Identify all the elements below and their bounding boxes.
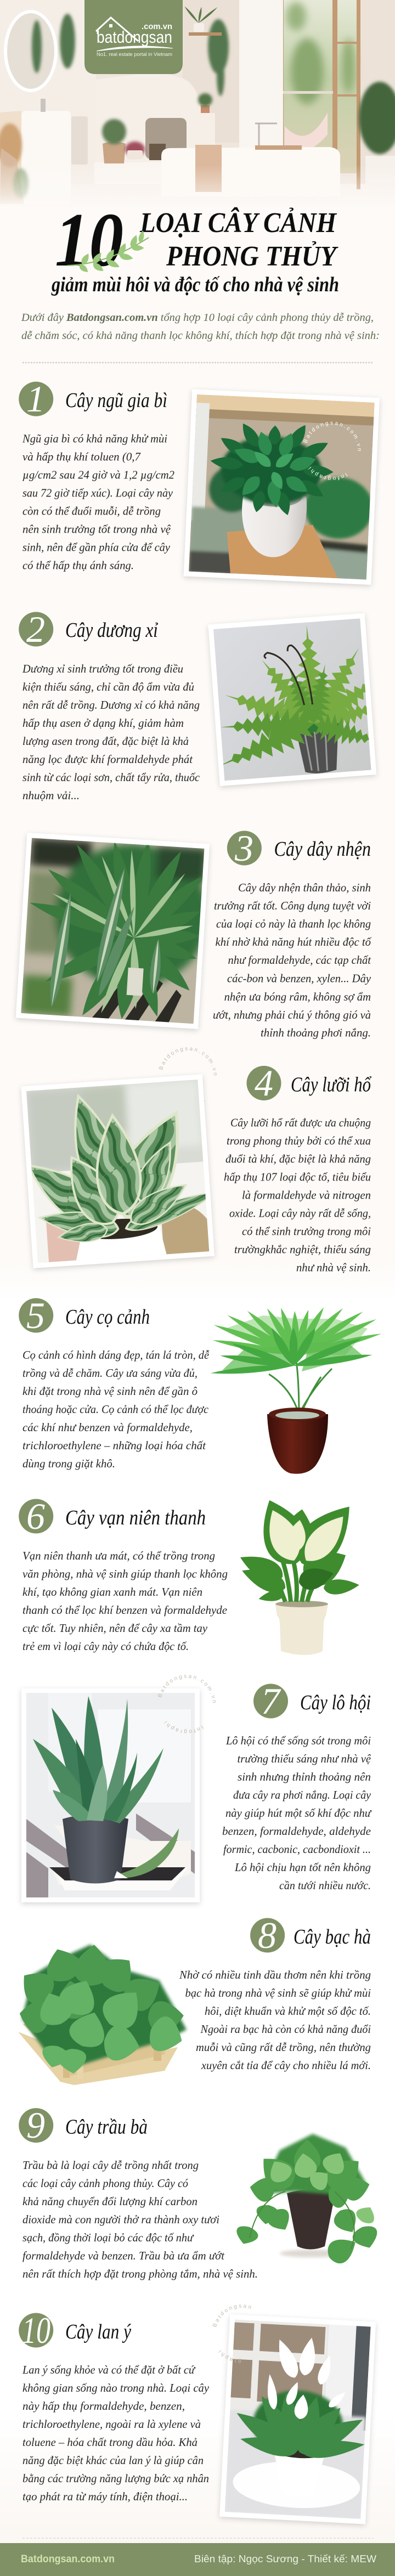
- text block 9: [22, 2159, 258, 2280]
- photo: snake plant: [12, 1074, 225, 1269]
- text block 8: Nhờ có nhiều tinh dầu thơm nên khi trồng: [179, 1968, 371, 1981]
- image: pothos in brown pot: [233, 2134, 381, 2268]
- number badge 7: 7: [261, 1680, 281, 1722]
- icon: house roof: [96, 18, 138, 41]
- photo: spider plant: [16, 832, 213, 1029]
- watermark stamp: Batdongsan.com.vn: [159, 1047, 217, 1075]
- text block 3: ướt, nhưng phải chú ý thông gió và: [213, 1008, 371, 1021]
- text block 1: sau 72 giờ tiếp xúc). Loại cây này: [22, 486, 173, 499]
- text block 4: hấp thụ 107 loại độc tố, tiêu biểu: [224, 1171, 371, 1184]
- text block 3: trưởng rất tốt. Công dụng tuyệt vời: [214, 899, 371, 912]
- text block 6: [22, 1549, 228, 1653]
- bath tap: [255, 123, 277, 145]
- title: PHONG THỦY: [166, 241, 338, 272]
- number badge 2: [19, 608, 53, 650]
- text block 6: Vạn niên thanh ưa mát, có thể trồng trong: [22, 1549, 215, 1562]
- text block 3: [213, 881, 371, 1039]
- panel: item 7: [19, 1675, 372, 1906]
- panel: item 9: [19, 2104, 381, 2280]
- text block 3: nhện ưa bóng râm, không sợ ẩm: [224, 990, 371, 1003]
- text block 4: oxide. Loại cây này rất dễ sống,: [229, 1207, 371, 1220]
- text block 4: [224, 1116, 371, 1274]
- curtain: [239, 0, 283, 151]
- title: LOẠI CÂY CẢNH: [139, 207, 337, 239]
- text block 7: benzen, formaldehyde, aldehyde: [222, 1824, 371, 1838]
- logo panel: .com.vn: [142, 22, 172, 31]
- logo panel: [84, 0, 183, 74]
- text block 3: Cây dây nhện thân thảo, sinh: [238, 881, 371, 894]
- mirror: [4, 10, 58, 92]
- panel: item 5: [19, 1295, 382, 1474]
- text block 7: Lô hội có thể sống sót trong môi: [225, 1734, 371, 1747]
- text block 4: như nhà vệ sinh.: [296, 1261, 371, 1274]
- number badge 4: [247, 1062, 281, 1104]
- text block 10: toluene – hóa chất trong dầu hỏa. Khả: [22, 2436, 198, 2449]
- bathtub: [161, 147, 340, 184]
- right plant and planter: [365, 156, 395, 184]
- text block 3: thỉnh thoảng phơi nắng.: [261, 1026, 371, 1039]
- subtitle: giảm mùi hôi và độc tố cho nhà vệ sinh: [51, 273, 339, 296]
- text block 5: trichloroethylene – những loại hóa chất: [22, 1439, 206, 1452]
- text block 9: sạch, đồng thời loại bỏ các độc tố như: [22, 2231, 194, 2244]
- panel: item 4: [19, 1047, 372, 1274]
- text block 10: [22, 2363, 210, 2503]
- text block 3: khí nhờ khả năng hút nhiều độc tố: [215, 935, 371, 948]
- text block 7: Lô hội chịu hạn tốt nên không: [234, 1861, 371, 1874]
- text block 2: hấp thụ asen ở dạng khí, giảm hàm: [22, 716, 184, 730]
- footer site name: Batdongsan.com.vn: [21, 2554, 115, 2565]
- watermark stamp: Batdongsan.com.vn: [158, 1675, 216, 1703]
- text block 2: [22, 662, 200, 802]
- text block 6: cực tốt. Tuy nhiên, nên để cây xa tầm tay: [22, 1622, 208, 1635]
- text block 10: trichloroethylene, ngoài ra là xylene và: [22, 2417, 201, 2431]
- panel: item 1: [19, 378, 382, 588]
- number badge 1: [19, 378, 53, 420]
- text block 4: trong phong thủy bởi có thể xua: [227, 1134, 371, 1148]
- text block 6: khí, tạo không gian xanh mát. Vạn niên: [22, 1585, 202, 1598]
- text block 9: Trầu bà là loại cây dễ trồng nhất trong: [22, 2159, 199, 2172]
- text block 9: dioxide mà con người thở ra thành oxy tươi: [22, 2213, 219, 2226]
- text block 5: [22, 1348, 210, 1470]
- heading 1: Cây ngũ gia bì: [65, 389, 167, 412]
- text block 1: và hấp thụ khí toluen (0,7: [22, 450, 141, 463]
- text block 3: như formaldehyde, các tạp chất: [228, 953, 371, 967]
- watermark stamp: [158, 1675, 216, 1733]
- heading 3: Cây dây nhện: [274, 838, 371, 861]
- text block 10: tạo phát ra từ máy tính, điện thoại...: [22, 2490, 188, 2503]
- text block 9: các loại cây cảnh phong thủy. Cây có: [22, 2177, 188, 2190]
- number badge 8: 8: [258, 1914, 276, 1956]
- text block 7: cần tưới nhiều nước.: [279, 1879, 371, 1892]
- heading 5: Cây cọ cảnh: [65, 1306, 150, 1329]
- panel: item 6: [19, 1492, 365, 1655]
- text block 5: dùng trong giặt khô.: [22, 1457, 115, 1470]
- number badge 9: [19, 2104, 53, 2146]
- left wall accents: [0, 111, 21, 204]
- sink: [21, 111, 71, 184]
- image: palm in red pot: [210, 1306, 382, 1474]
- text block 4: có thể sinh trưởng trong môi: [242, 1224, 371, 1238]
- photo: aloe vera: [21, 1688, 200, 1902]
- panel: item 2: [19, 608, 393, 802]
- photo: peace lily: [219, 2314, 376, 2524]
- text block 2: sinh từ các loại sơn, chất tẩy rửa, thuốc: [22, 771, 200, 784]
- watermark stamp: [159, 1047, 217, 1101]
- text block 2: kiện thiếu sáng, chỉ cần độ ẩm vừa đủ: [22, 680, 194, 693]
- title: 10: [55, 197, 123, 283]
- photo: schefflera in white pot: Batdongsan.com.vn: [303, 421, 361, 451]
- window: [282, 0, 360, 173]
- text block 3: các-bon và benzen, xylen... Dây: [227, 972, 371, 985]
- text block 7: này giúp hút một số khí độc như: [225, 1806, 372, 1820]
- number badge 7: [253, 1680, 288, 1722]
- text block 9: khả năng chuyển đổi lượng khí carbon: [22, 2195, 198, 2208]
- intro text: dễ chăm sóc, có khả năng thanh lọc không khí, thích hợp đặt trong nhà vệ sinh:: [21, 330, 380, 342]
- photo: schefflera in white pot: [182, 389, 382, 588]
- text block 7: formic, cacbonic, cacbondioxit ...: [223, 1843, 371, 1856]
- text block 6: văn phòng, nhà vệ sinh giúp thanh lọc không: [22, 1567, 228, 1580]
- text block 8: muỗi và cũng rất dễ trồng, nên thường: [196, 2041, 371, 2054]
- shelf and pots: [189, 32, 222, 36]
- text block 3: của loại cỏ này là thanh lọc không: [216, 917, 371, 930]
- photo: schefflera in white pot: Infographic: [308, 467, 348, 481]
- heading 7: Cây lô hội: [300, 1691, 371, 1714]
- footer band: [0, 2543, 395, 2576]
- number badge 4: 4: [255, 1062, 273, 1104]
- text block 9: formaldehyde và benzen. Trầu bà ưa ẩm ướt: [22, 2249, 225, 2262]
- heading 2: Cây dương xỉ: [65, 619, 158, 642]
- hero bottom fade: [0, 165, 395, 208]
- number badge 6: [19, 1495, 53, 1537]
- text block 1: nên sinh trưởng tốt trong nhà vệ: [22, 522, 171, 535]
- text block 1: sinh, nên để gần phía cửa để cây: [22, 541, 171, 554]
- intro text: Dưới đây Batdongsan.com.vn tổng hợp 10 loại cây cảnh phong thủy dễ trồng,: [21, 312, 374, 324]
- number badge 1: 1: [26, 378, 45, 420]
- text block 7: [222, 1734, 372, 1892]
- text block 10: này hấp thụ formaldehyde, benzen,: [22, 2399, 185, 2413]
- text block 6: thanh có thể lọc khí benzen và formaldehyde: [22, 1603, 227, 1617]
- footer credits: Biên tập: Ngọc Sương - Thiết kế: MEW: [194, 2554, 376, 2564]
- text block 5: trồng và dễ chăm. Cây ưa sáng vừa đủ,: [22, 1366, 198, 1380]
- heading 9: Cây trầu bà: [65, 2115, 148, 2138]
- text block 2: Dương xỉ sinh trưởng tốt trong điều: [22, 662, 183, 675]
- text block 8: hôi, diệt khuẩn và khử một số độc tố.: [205, 2004, 371, 2018]
- text block 4: Cây lưỡi hổ rất được ưa chuộng: [230, 1116, 371, 1129]
- text block 10: không gian sống nào trong nhà. Loại cây: [22, 2381, 210, 2394]
- text block 2: năng lọc được khí formaldehyde phát: [22, 753, 193, 766]
- heading 6: Cây vạn niên thanh: [65, 1506, 206, 1529]
- watermark stamp: Batdongsan: [213, 2304, 251, 2327]
- text block 8: xuyên cắt tỉa để cây cho nhiều lá mới.: [201, 2059, 371, 2072]
- text block 1: µg/cm2 sau 24 giờ và 1,2 µg/cm2: [22, 468, 174, 482]
- number badge 5: [19, 1295, 53, 1336]
- number badge 10: 10: [22, 2309, 50, 2351]
- text block 4: đuổi tà khí, đặc biệt là khả năng: [225, 1152, 371, 1165]
- hero bathroom scene: [0, 0, 395, 208]
- panel: item 8: [14, 1914, 371, 2085]
- basket and plant: [103, 142, 126, 163]
- text block 7: sinh nhưng thỉnh thoảng nên: [238, 1770, 371, 1783]
- text block 10: Lan ý sống khỏe và có thể đặt ở bất cứ: [22, 2363, 195, 2376]
- title: [55, 197, 338, 283]
- logo panel: batdongsan: [97, 27, 172, 47]
- icon: leaf branch: [67, 230, 149, 274]
- watermark stamp: Infographic: [204, 1100, 205, 1101]
- image: mint in wooden box: [14, 1943, 188, 2085]
- fireplace wall: [96, 74, 215, 163]
- photo: fern: [203, 612, 393, 787]
- panel: item 3: [16, 827, 371, 1039]
- watermark stamp: [213, 2304, 251, 2363]
- text block 1: [22, 432, 174, 572]
- intro text: [21, 312, 380, 342]
- text block 10: bằng các trường năng lượng bức xạ nhân: [22, 2472, 209, 2485]
- number badge 5: 5: [26, 1295, 45, 1336]
- number badge 3: [227, 827, 262, 869]
- text block 1: có thể hấp thụ ánh sáng.: [22, 558, 134, 572]
- text block 10: năng đặc biệt khác của lan ý là giúp cân: [22, 2454, 204, 2467]
- text block 5: khi đặt trong nhà vệ sinh nên để gần ô: [22, 1385, 198, 1398]
- watermark stamp: graphic: [218, 2350, 241, 2363]
- image: dieffenbachia in cream pot: [236, 1492, 365, 1655]
- hammock: [285, 112, 328, 147]
- text block 9: nên rất thích hợp đặt trong phòng tắm, nhà vệ sinh.: [22, 2267, 258, 2280]
- watermark stamp: Infographic: [163, 1721, 204, 1733]
- hanging plants: [32, 14, 229, 96]
- logo panel: No1. real estate portal in Vietnam: [97, 52, 172, 58]
- text block 2: nhuộm vải...: [22, 789, 80, 802]
- text block 5: thoáng hoặc cửa. Cọ cảnh có thể lọc được: [22, 1403, 209, 1416]
- heading 4: Cây lưỡi hổ: [291, 1073, 372, 1096]
- number badge 9: 9: [26, 2104, 45, 2146]
- panel: item 10: [19, 2304, 377, 2528]
- text block 8: bạc hà trong nhà vệ sinh sẽ giúp khử mùi: [185, 1986, 371, 1999]
- heading 10: Cây lan ý: [65, 2320, 131, 2343]
- text block 1: còn có thể đuổi muỗi, dễ trồng: [22, 505, 161, 518]
- text block 8: [179, 1968, 371, 2072]
- text block 7: đưa cây ra phơi nắng. Loại cây: [233, 1788, 371, 1801]
- text block 2: nên rất dễ trồng. Dương xỉ có khả năng: [22, 698, 200, 711]
- text block 7: trường thiếu sáng như nhà vệ: [237, 1752, 371, 1765]
- text block 8: Ngoài ra bạc hà còn có khả năng đuổi: [200, 2023, 371, 2036]
- text block 2: lượng asen trong đất, đặc biệt là khả: [22, 735, 189, 748]
- text block 6: trẻ em vì loại cây này có chứa độc tố.: [22, 1640, 189, 1653]
- heading 8: Cây bạc hà: [294, 1925, 371, 1948]
- number badge 6: 6: [26, 1495, 45, 1537]
- text block 5: Cọ cảnh có hình dáng đẹp, tán lá tròn, dễ: [22, 1348, 210, 1362]
- text block 5: các khí như benzen và formaldehyde,: [22, 1421, 193, 1434]
- number badge 8: [250, 1914, 285, 1956]
- number badge 2: 2: [26, 608, 45, 650]
- text block 1: Ngũ gia bì có khả năng khử mùi: [22, 432, 167, 445]
- number badge 3: 3: [234, 827, 253, 869]
- text block 4: trườngkhắc nghiệt, thiếu sáng: [234, 1243, 371, 1256]
- text block 4: là formaldehyde và nitrogen: [242, 1188, 371, 1201]
